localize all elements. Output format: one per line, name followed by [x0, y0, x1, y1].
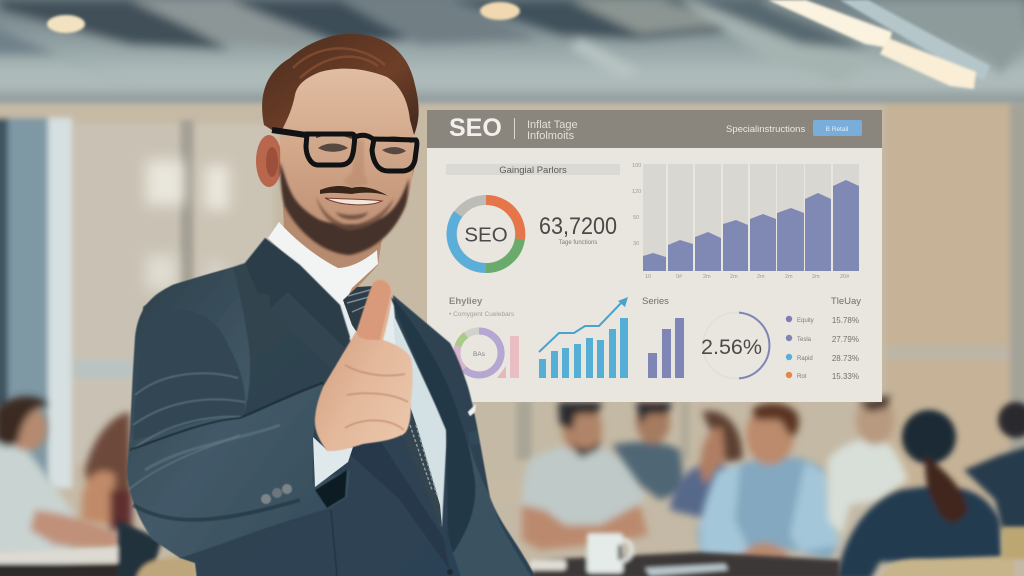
thumbs-up hand [315, 279, 413, 451]
big number: 63,7200: 63,7200 [539, 213, 617, 240]
bar chart with growth arrow [539, 297, 628, 378]
heading: Series: Series [642, 296, 669, 307]
column chart: blue pentagon bars: 0# [676, 274, 683, 280]
panel header: B Retail [826, 126, 849, 133]
small donut chart with pink bars [457, 331, 519, 378]
panel header: Infolmoits [527, 130, 575, 142]
person: man at right [964, 402, 1024, 530]
person: woman at left [82, 412, 132, 530]
panel header: SEO [449, 114, 502, 142]
big number: 63,7200: Tage functions [559, 240, 597, 246]
panel header: Inflat Tage [527, 119, 578, 131]
column chart: blue pentagon bars: 120 [632, 189, 641, 195]
person: left man [0, 396, 122, 555]
beard [280, 162, 409, 255]
purple bar chart [648, 318, 684, 378]
necktie [343, 286, 442, 527]
column chart: blue pentagon bars [632, 163, 859, 280]
ceiling lights [47, 0, 990, 89]
column chart: blue pentagon bars: 20# [840, 274, 850, 280]
person: man in blue shirt [697, 403, 840, 566]
smile [320, 186, 388, 205]
head [256, 34, 419, 255]
window glow [146, 160, 229, 290]
legend: Tletlay: 15.78% [832, 316, 859, 325]
eyes [316, 134, 412, 154]
column chart: blue pentagon bars: 2m [785, 274, 793, 280]
audience: seated people and table [0, 395, 1024, 576]
man giving thumbs up [127, 34, 537, 576]
small donut chart with pink bars: BAs [473, 351, 486, 358]
column chart: blue pentagon bars: 100 [632, 163, 641, 169]
section heading: Gaingial Parlors: Gaingial Parlors [499, 165, 567, 176]
sleeve buttons [261, 484, 292, 504]
column chart: blue pentagon bars: 30 [633, 241, 639, 247]
section heading: Gaingial Parlors [446, 164, 620, 176]
shirt and collar [268, 222, 447, 530]
column chart: blue pentagon bars: 2m [812, 274, 820, 280]
person: man in dark shirt [612, 400, 685, 500]
heading: Ehyliey [449, 296, 515, 318]
column chart: blue pentagon bars: 50 [633, 215, 639, 221]
legend: Tletlay: 27.79% [832, 335, 859, 344]
person: woman with ponytail [836, 410, 1002, 576]
left lapel [245, 238, 350, 370]
legend: Tletlay [786, 296, 861, 381]
donut chart: SEO: SEO [464, 224, 508, 246]
heading: Ehyliey: • Comygent Cuelebars [449, 311, 515, 318]
column chart: blue pentagon bars: 2m [730, 274, 738, 280]
conference table and mug [530, 533, 840, 576]
legend: Tletlay: Tesla [797, 337, 812, 343]
legend: Tletlay: TleUay [831, 296, 861, 307]
panel: SEO dashboard [427, 110, 882, 402]
panel body [427, 110, 882, 402]
column chart: blue pentagon bars: 2m [703, 274, 711, 280]
shirt cuff [313, 437, 353, 487]
donut chart: SEO [451, 200, 520, 268]
glasses [272, 130, 417, 171]
legend: Tletlay: 15.33% [832, 372, 859, 381]
column chart: blue pentagon bars: 10 [645, 274, 651, 280]
neck [283, 205, 384, 312]
chairs [880, 527, 1024, 576]
walls [0, 104, 1024, 504]
left table [0, 520, 196, 576]
legend: Tletlay: 28.73% [832, 354, 859, 363]
suit jacket body [143, 238, 537, 576]
ceiling [0, 0, 1024, 106]
ring gauge: 2.56%: 2.56% [701, 335, 762, 359]
panel header [427, 110, 882, 148]
person: woman behind [670, 411, 742, 520]
legend: Tletlay: Rot [797, 374, 807, 380]
nose [343, 140, 368, 188]
jacket sleeve [127, 268, 350, 558]
ear [256, 135, 282, 187]
legend: Tletlay: Rapid [797, 356, 813, 362]
face [280, 60, 414, 254]
panel header: Specialinstructions [726, 124, 805, 135]
legend: Tletlay: Equity [797, 318, 814, 324]
column chart: blue pentagon bars: 2m [757, 274, 765, 280]
hair [262, 34, 419, 135]
ring gauge: 2.56% [701, 312, 769, 378]
person: man in grey t-shirt [522, 402, 648, 550]
heading: Ehyliey: Ehyliey [449, 296, 483, 307]
person: man in white shirt [828, 395, 908, 535]
